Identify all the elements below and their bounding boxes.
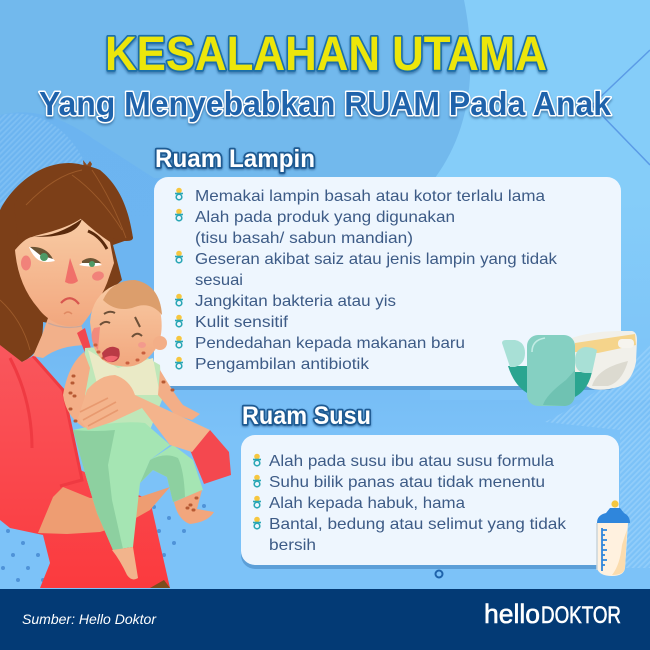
heading: ruam susu: Ruam Susu xyxy=(242,402,371,430)
title: KESALAHAN UTAMA xyxy=(105,28,547,81)
logo: hello doktor: DOKTOR xyxy=(541,602,621,629)
bottom trouser xyxy=(150,580,170,588)
list: ruam susu: bersih xyxy=(269,537,316,554)
mother bangs xyxy=(14,164,133,241)
mother face xyxy=(15,218,114,326)
list: ruam susu: Suhu bilik panas atau tidak menentu xyxy=(269,474,545,491)
list: ruam susu xyxy=(269,453,567,554)
icons: pacifier bullets xyxy=(175,188,261,529)
mother forearm xyxy=(38,487,170,534)
baby back leg xyxy=(140,445,203,502)
leg rash xyxy=(187,498,197,510)
list: ruam susu: Alah kepada habuk, hama xyxy=(269,495,465,512)
mother cheeks xyxy=(21,256,31,270)
subtitle: Yang Menyebabkan RUAM Pada Anak xyxy=(39,85,612,122)
mother eyes xyxy=(29,247,55,262)
baby foot left xyxy=(112,547,138,579)
baby foot right xyxy=(174,490,214,524)
mother neck and chest xyxy=(33,318,88,358)
panel: ruam susu card xyxy=(241,435,619,569)
illustration: green diaper xyxy=(502,335,597,406)
source text: Sumber: Hello Doktor xyxy=(22,611,157,627)
logo: hello doktor: hello xyxy=(484,599,540,629)
footer bar xyxy=(0,589,650,650)
mother neck band xyxy=(48,323,82,327)
baby singlet xyxy=(83,345,162,430)
mother upper arm and hand xyxy=(78,375,210,452)
mother torso xyxy=(0,345,170,588)
baby left arm xyxy=(63,352,110,446)
list: ruam susu: Alah pada susu ibu atau susu formula xyxy=(269,453,554,470)
panel: ruam lampin card xyxy=(154,177,621,390)
list: ruam lampin: Jangkitan bakteria atau yis xyxy=(195,293,396,310)
list: ruam lampin: (tisu basah/ sabun mandian) xyxy=(195,230,413,247)
heading: ruam lampin: Ruam Lampin xyxy=(155,145,315,173)
mother back hair xyxy=(0,163,133,362)
baby head xyxy=(90,283,162,367)
mother hair tuft xyxy=(83,160,92,171)
illustration: mother and crying baby xyxy=(0,160,231,588)
list: ruam lampin: Kulit sensitif xyxy=(195,314,289,331)
list: ruam lampin: sesuai xyxy=(195,272,243,289)
mother right sleeve xyxy=(190,430,231,484)
logo: hello doktor xyxy=(484,599,621,629)
decorative dots xyxy=(1,504,206,582)
baby right arm xyxy=(158,370,200,420)
illustration: milk bottle xyxy=(596,500,630,576)
list: ruam lampin: Memakai lampin basah atau kotor terlalu lama xyxy=(195,188,545,205)
baby mouth xyxy=(102,347,120,362)
baby hair xyxy=(103,280,162,315)
baby rash and cheek xyxy=(92,327,100,350)
mother sleeve fold xyxy=(10,356,82,486)
arm rash xyxy=(70,376,173,421)
list: ruam lampin: Alah pada produk yang digunakan xyxy=(195,209,455,226)
mother brow right xyxy=(88,231,107,249)
illustration: white diaper xyxy=(570,331,637,390)
baby front leg xyxy=(73,422,170,550)
list: ruam susu: Bantal, bedung atau selimut yang tidak xyxy=(269,516,567,533)
mother nose xyxy=(65,258,78,284)
list: ruam lampin xyxy=(195,188,558,373)
list: ruam lampin: Pendedahan kepada makanan baru xyxy=(195,335,465,352)
baby eyes and brows xyxy=(100,312,142,337)
list: ruam lampin: Pengambilan antibiotik xyxy=(195,356,370,373)
red collar xyxy=(77,328,92,355)
mother mouth xyxy=(61,298,79,304)
list: ruam lampin: Geseran akibat saiz atau jenis lampin yang tidak xyxy=(195,251,558,268)
